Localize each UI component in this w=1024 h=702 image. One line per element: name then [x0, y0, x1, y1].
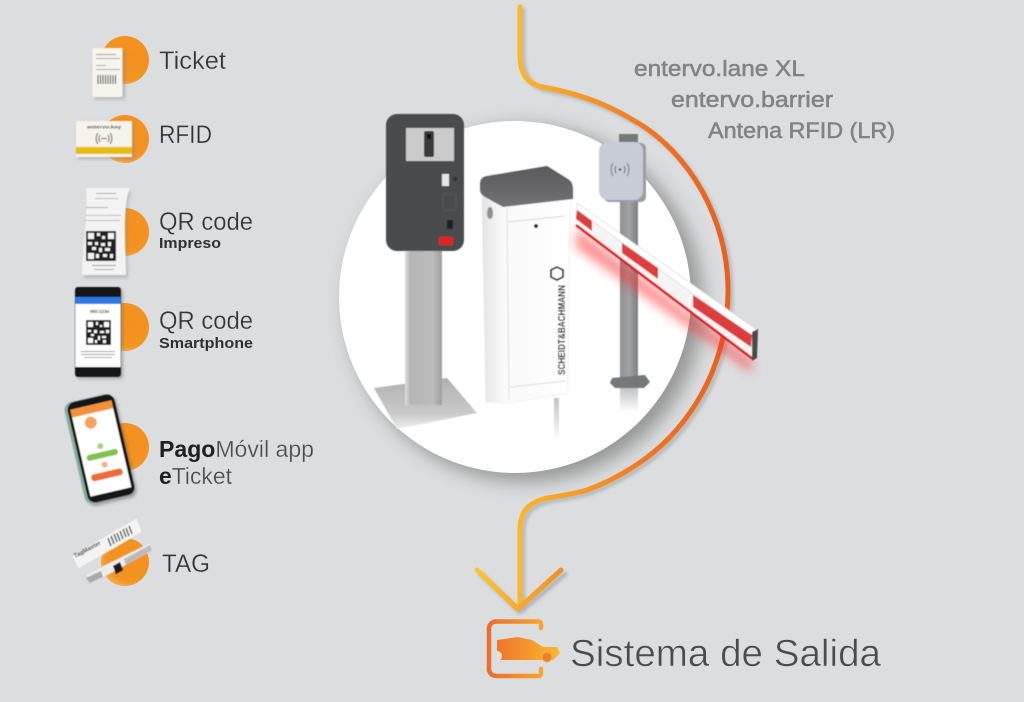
sublabel: Impreso	[159, 236, 221, 252]
label: QR code	[159, 307, 253, 335]
pole base	[610, 375, 650, 388]
barrier entervo.barrier	[480, 166, 573, 440]
label: PagoMóvil app	[159, 436, 314, 462]
cabinet	[482, 196, 570, 403]
label: RFID	[159, 121, 212, 149]
qr code	[86, 320, 111, 345]
ticket	[92, 48, 125, 99]
sublabel: Smartphone	[159, 336, 253, 352]
label: entervo.barrier: entervo.barrier	[671, 87, 833, 112]
red slot	[439, 237, 453, 245]
label: Ticket	[159, 47, 226, 75]
media: QR code printed	[82, 188, 253, 278]
orange disc	[101, 423, 149, 471]
system title: Sistema de Salida	[570, 633, 882, 675]
label: Antena RFID: Antena RFID (LR)	[708, 118, 895, 143]
media: QR code smartphone	[75, 287, 253, 379]
label: TAG	[162, 550, 210, 578]
white product circle	[339, 121, 703, 482]
pay station entervo.lane XL	[374, 114, 477, 429]
tag strips: TagMaster	[73, 540, 103, 560]
upper arm face	[577, 203, 757, 337]
bracket icon	[489, 622, 541, 676]
arrowhead	[477, 570, 565, 612]
pole	[405, 250, 442, 405]
red glow	[576, 228, 752, 373]
station body	[386, 114, 464, 251]
base plate	[374, 378, 477, 429]
label: QR code	[159, 208, 253, 236]
cabinet cap	[480, 166, 573, 207]
qr code	[86, 231, 116, 261]
phone: #BC1234	[90, 309, 110, 314]
phone	[75, 287, 123, 379]
tilted phone	[63, 393, 138, 507]
antenna RFID	[599, 134, 650, 412]
media: RFID	[76, 115, 212, 163]
card: entervo.key	[87, 124, 122, 130]
orange disc	[101, 115, 149, 163]
barrier arm	[576, 203, 758, 373]
display window	[406, 128, 454, 161]
media: TAG	[72, 518, 210, 586]
orange disc	[101, 208, 149, 256]
reflection	[554, 398, 559, 440]
orange disc	[101, 303, 149, 351]
pole fade	[620, 388, 638, 412]
flow arrow line	[520, 7, 731, 605]
ticket slot and reader	[442, 174, 457, 229]
car icon	[497, 637, 560, 660]
brand logo	[551, 267, 563, 280]
brand name: SCHEIDT&BACHMANN	[556, 285, 568, 375]
receipt	[82, 188, 131, 278]
arm body	[576, 203, 757, 360]
red stripes	[576, 210, 592, 231]
antenna reader	[599, 142, 646, 202]
system logo	[489, 622, 882, 676]
media: PagoMóvil app	[63, 393, 314, 507]
lower red edge	[576, 225, 753, 359]
label: entervo.lane XL: entervo.lane XL	[634, 56, 805, 81]
media: Ticket	[92, 36, 226, 99]
arm end cap	[752, 329, 758, 361]
orange disc	[101, 538, 149, 586]
antenna pole	[620, 134, 638, 380]
product labels	[634, 56, 895, 143]
sublabel: eTicket	[159, 463, 233, 489]
orange disc	[101, 36, 149, 84]
